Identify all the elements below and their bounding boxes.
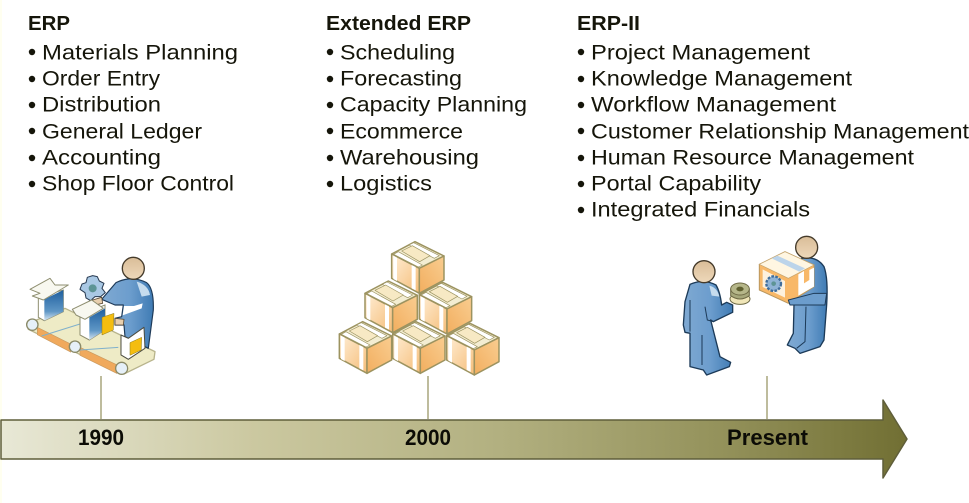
connector: 1990 [100,376,102,419]
label: 2000: 2000 [405,425,451,450]
list: ERP-II items: Project Management [591,40,810,64]
panel: ERP-II list [577,13,969,222]
list: Extended ERP items [327,40,527,196]
heading: Extended ERP: Extended ERP [326,13,471,35]
list: Extended ERP items: Ecommerce [340,120,463,144]
list: ERP-II items: Knowledge Management [591,66,852,90]
list: ERP items [29,40,238,196]
icon: stacked crates [339,242,499,375]
list: ERP-II items: Portal Capability [591,172,761,196]
list: Extended ERP items: Scheduling [340,40,455,64]
list: ERP items: Materials Planning [42,40,238,64]
list: ERP items: General Ledger [42,120,202,144]
list: ERP items: Shop Floor Control [42,172,234,196]
connector: 2000 [427,376,429,419]
list: ERP items: Distribution [42,92,161,116]
label: 1990: 1990 [78,425,124,450]
connector: Present [766,376,768,419]
icon: two workers exchanging parts [683,236,827,375]
list: Extended ERP items: Logistics [340,172,432,196]
list: ERP-II items: Customer Relationship Management [591,120,969,144]
heading: ERP-II: ERP-II [577,13,640,35]
panel: ERP list [28,13,238,196]
list: ERP-II items [578,40,969,222]
list: ERP-II items: Workflow Management [591,92,836,116]
list: ERP items: Order Entry [42,66,160,90]
label: Present: Present [727,425,809,450]
list: ERP-II items: Integrated Financials [591,198,810,222]
panel: Extended ERP list [326,13,527,196]
list: ERP items: Accounting [42,146,161,170]
right worker with box [759,236,827,353]
icon: worker at conveyor belt [27,257,155,374]
arrow: timeline [1,400,907,478]
list: Extended ERP items: Capacity Planning [340,92,527,116]
left edge tint [0,0,2,503]
list: Extended ERP items: Forecasting [340,66,462,90]
list: Extended ERP items: Warehousing [340,146,479,170]
list: ERP-II items: Human Resource Management [591,146,914,170]
left worker [683,261,750,375]
heading: ERP: ERP [28,13,70,35]
